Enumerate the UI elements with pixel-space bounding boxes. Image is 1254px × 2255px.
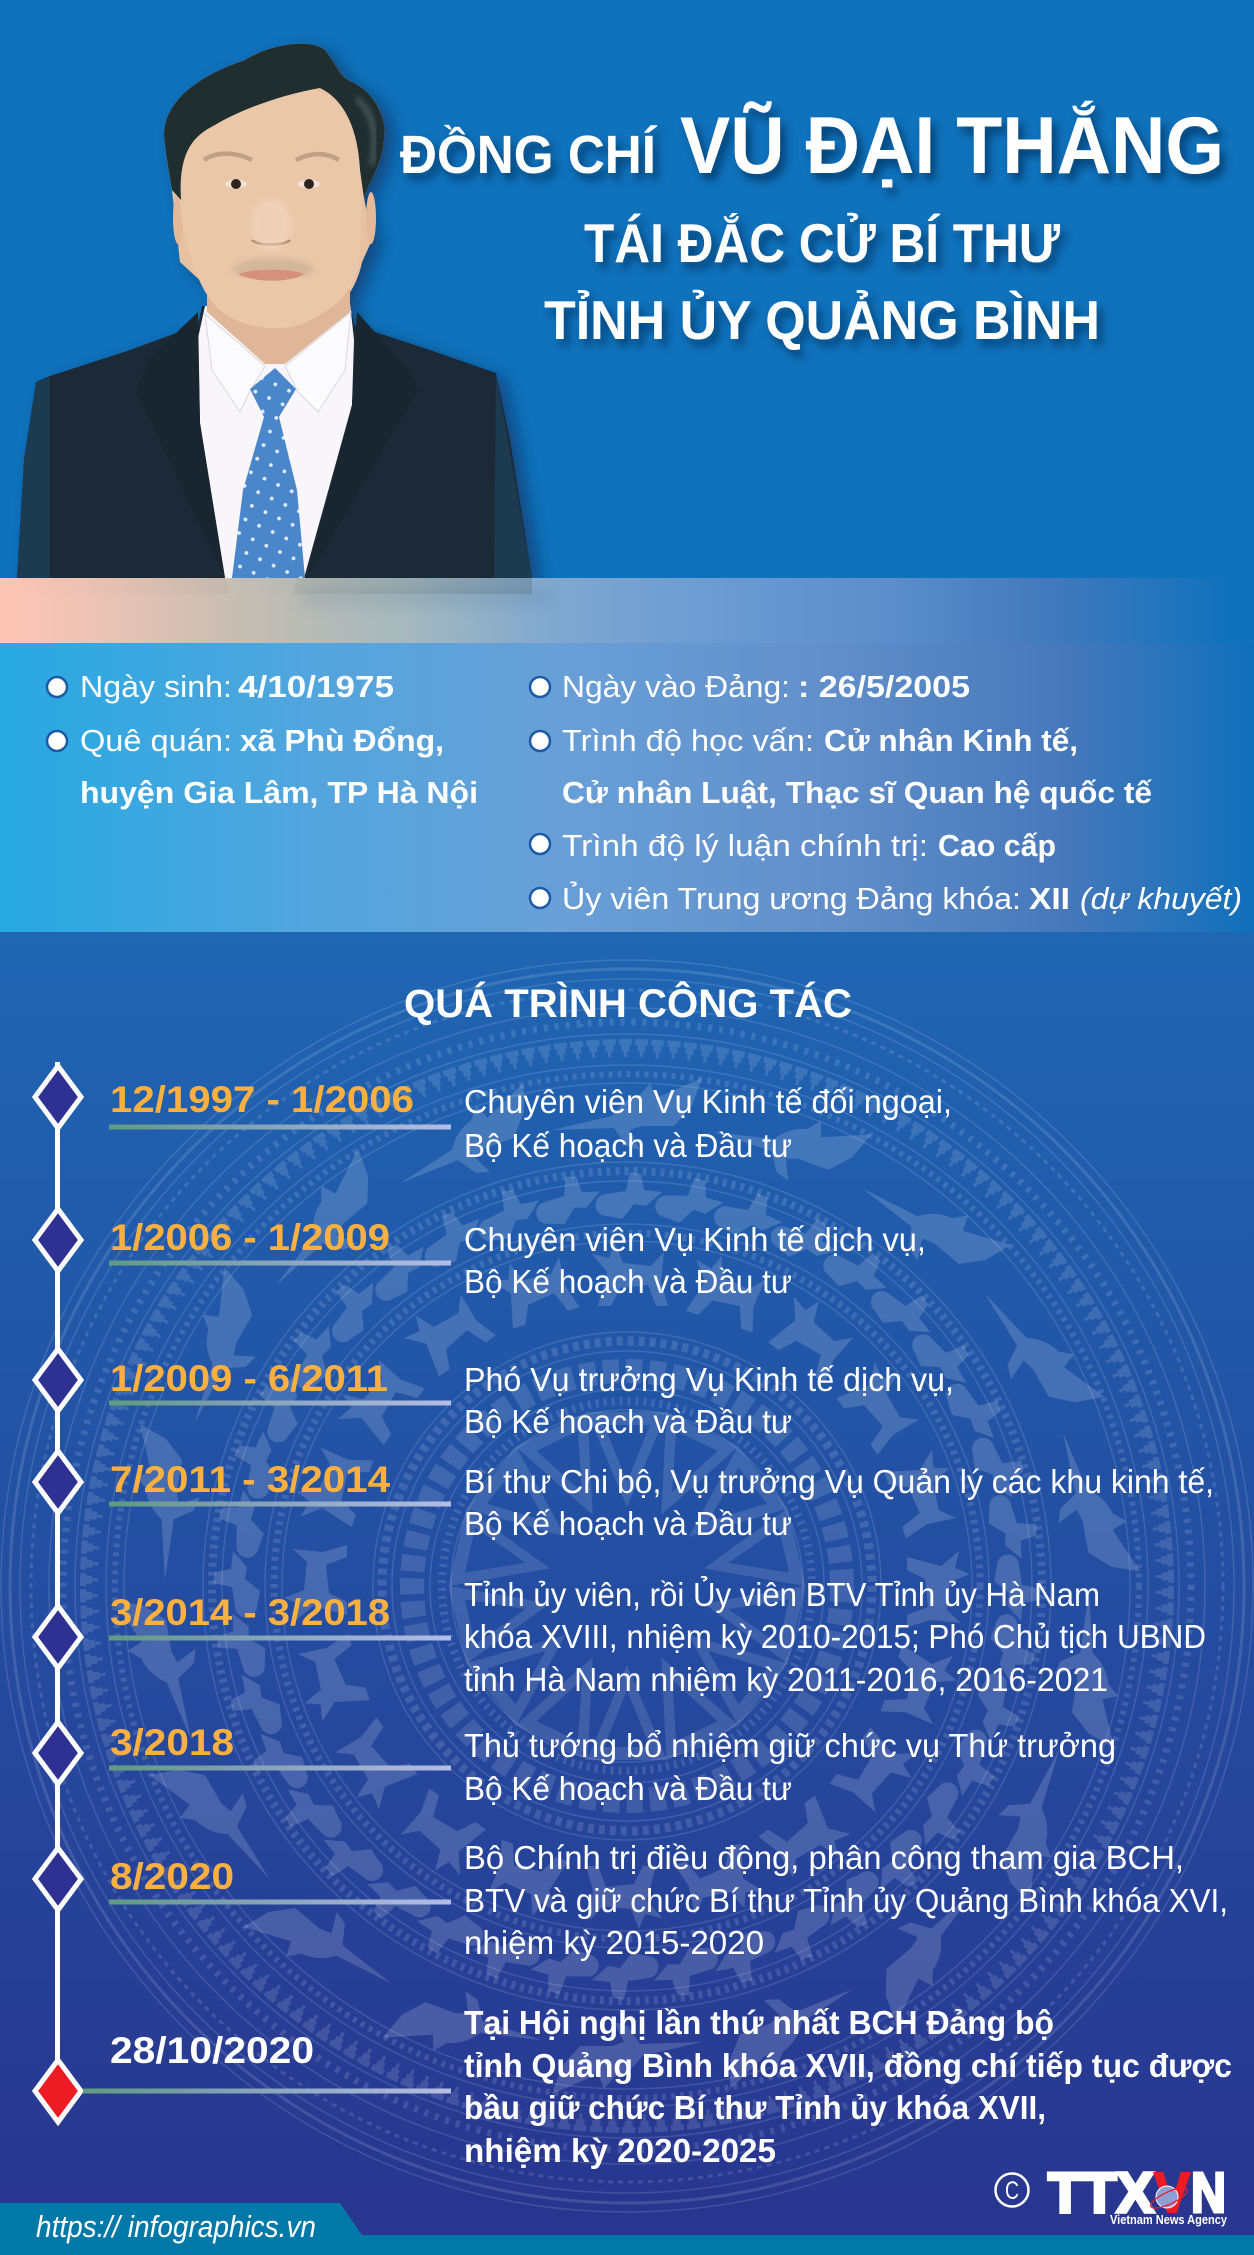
title: TÁI ĐẮC CỬ BÍ THƯ [584,212,1060,274]
background drum pattern [1,960,1253,2212]
logo: TTXVN: N [1191,2161,1226,2225]
logo: TTXVN [996,2161,1227,2227]
info left column: Ngày sinh: [80,669,232,704]
timeline descriptions: BTV và giữ chức Bí thư Tỉnh ủy Quảng Bình khóa XVI, [464,1882,1228,1919]
timeline dates: 8/2020 [110,1856,234,1897]
logo: TTXVN: V [1154,2161,1190,2225]
copyright mark: C [1005,2177,1019,2205]
info right column: XII [1029,881,1070,916]
lapels [136,312,418,578]
background: timeline section [0,932,1254,2255]
timeline descriptions: tỉnh Hà Nam nhiệm kỳ 2011-2016, 2016-2021 [464,1661,1108,1698]
info left column: 4/10/1975 [238,669,394,704]
timeline descriptions: Thủ tướng bổ nhiệm giữ chức vụ Thứ trưởng [464,1727,1116,1764]
jacket and head with shadow [17,44,532,578]
info right column: (dự khuyết) [1080,881,1242,916]
jacket side panels [17,373,532,578]
timeline descriptions: Bộ Kế hoạch và Đầu tư [464,1403,792,1440]
title [400,100,1224,351]
portrait bottom shadow overlay [0,578,550,604]
timeline underlines [83,1124,451,2094]
panel: personal info [0,643,1254,932]
timeline descriptions: Bộ Chính trị điều động, phân công tham gia BCH, [464,1839,1184,1876]
timeline descriptions: Bí thư Chi bộ, Vụ trưởng Vụ Quản lý các khu kinh tế, [464,1463,1214,1500]
timeline descriptions: Tỉnh ủy viên, rồi Ủy viên BTV Tỉnh ủy Hà Nam [464,1576,1100,1613]
timeline descriptions: nhiệm kỳ 2015-2020 [464,1924,764,1961]
timeline descriptions: Chuyên viên Vụ Kinh tế dịch vụ, [464,1221,926,1258]
footer bar [0,2203,1254,2255]
neck [207,265,350,364]
title: ĐỒNG CHÍ [400,125,658,185]
info right column: : 26/5/2005 [798,669,970,704]
globe [1148,2184,1190,2212]
collar lines [205,312,351,412]
info left column [80,669,478,810]
timeline dates: 28/10/2020 [110,2030,314,2071]
timeline descriptions: Bộ Kế hoạch và Đầu tư [464,1505,792,1542]
info right column: Ngày vào Đảng: [562,669,790,704]
heading: work history: QUÁ TRÌNH CÔNG TÁC [404,980,852,1026]
timeline descriptions: nhiệm kỳ 2020-2025 [464,2132,776,2169]
timeline descriptions: Phó Vụ trưởng Vụ Kinh tế dịch vụ, [464,1361,954,1398]
portrait photo illustration [17,44,532,578]
info right column [562,669,1242,916]
timeline dates: 3/2018 [110,1722,234,1763]
info right column: Cử nhân Luật, Thạc sĩ Quan hệ quốc tế [562,775,1153,810]
timeline descriptions: bầu giữ chức Bí thư Tỉnh ủy khóa XVII, [464,2089,1046,2126]
info right column: Trình độ học vấn: [562,723,814,758]
timeline dates: 12/1997 - 1/2006 [110,1079,414,1120]
timeline descriptions: Bộ Kế hoạch và Đầu tư [464,1263,792,1300]
timeline descriptions [464,1083,1232,2169]
title: TỈNH ỦY QUẢNG BÌNH [544,289,1100,351]
timeline descriptions: khóa XVIII, nhiệm kỳ 2010-2015; Phó Chủ tịch UBND [464,1618,1206,1655]
timeline dates [110,1079,414,2071]
copyright mark [996,2174,1028,2206]
shirt [198,303,354,578]
info left column: xã Phù Đổng, [240,723,444,758]
timeline dates: 1/2009 - 6/2011 [110,1358,388,1399]
hair [164,44,385,200]
face [173,89,376,328]
footer url: https:// infographics.vn [36,2209,316,2244]
logo: TTXVN: TTX [1048,2161,1154,2225]
gradient band under portrait [0,578,1254,643]
info right column: Cử nhân Kinh tế, [824,723,1078,758]
timeline descriptions: Chuyên viên Vụ Kinh tế đối ngoại, [464,1083,952,1120]
background: top blue [0,0,1254,932]
timeline descriptions: tỉnh Quảng Bình khóa XVII, đồng chí tiếp tục được [464,2047,1232,2084]
timeline descriptions: Bộ Kế hoạch và Đầu tư [464,1127,792,1164]
timeline dates: 7/2011 - 3/2014 [110,1459,390,1500]
timeline descriptions: Tại Hội nghị lần thứ nhất BCH Đảng bộ [464,2004,1054,2041]
info right column: Cao cấp [938,828,1056,863]
tie [232,368,305,578]
timeline axis and markers [35,1062,81,2122]
title: VŨ ĐẠI THẮNG [680,100,1224,191]
info left column: Quê quán: [80,723,232,758]
bullets [47,677,550,908]
timeline dates: 3/2014 - 3/2018 [110,1592,390,1633]
info left column: huyện Gia Lâm, TP Hà Nội [80,775,478,810]
logo: TTXVN: Vietnam News Agency [1110,2213,1227,2227]
info right column: Trình độ lý luận chính trị: [562,828,928,863]
timeline dates: 1/2006 - 1/2009 [110,1217,390,1258]
timeline descriptions: Bộ Kế hoạch và Đầu tư [464,1770,792,1807]
info right column: Ủy viên Trung ương Đảng khóa: [562,880,1021,916]
